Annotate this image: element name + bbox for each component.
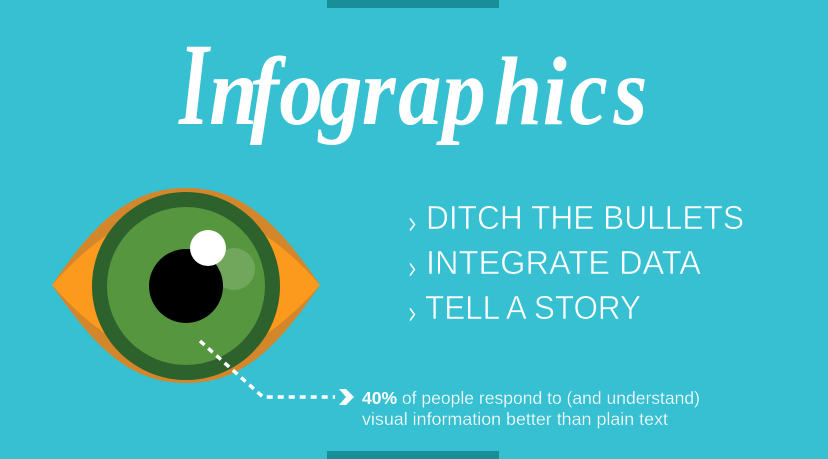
callout text: 40% of people respond to (and understand) bbox=[362, 388, 700, 408]
arrow head bbox=[339, 389, 354, 405]
pupil bbox=[149, 249, 223, 323]
callout text: visual information better than plain text bbox=[362, 409, 668, 429]
callout text bbox=[362, 388, 700, 429]
iris outer ring bbox=[92, 192, 280, 380]
bottom accent bar bbox=[327, 451, 499, 459]
bullet list bbox=[410, 199, 744, 326]
iris bbox=[107, 207, 265, 365]
bullet: integrate data: INTEGRATE DATA bbox=[426, 244, 701, 281]
bullet: ditch the bullets: DITCH THE BULLETS bbox=[426, 199, 744, 236]
top accent bar bbox=[327, 0, 499, 8]
eyelid bbox=[52, 188, 320, 383]
title: nfographics bbox=[209, 37, 647, 146]
white highlight bbox=[190, 230, 226, 266]
bullet: tell a story: TELL A STORY bbox=[425, 289, 641, 326]
icon: eye bbox=[52, 188, 320, 383]
title: I bbox=[178, 18, 211, 150]
dashed arrow bbox=[200, 341, 354, 405]
soft highlight bbox=[213, 248, 255, 290]
eye white area bbox=[52, 208, 320, 362]
